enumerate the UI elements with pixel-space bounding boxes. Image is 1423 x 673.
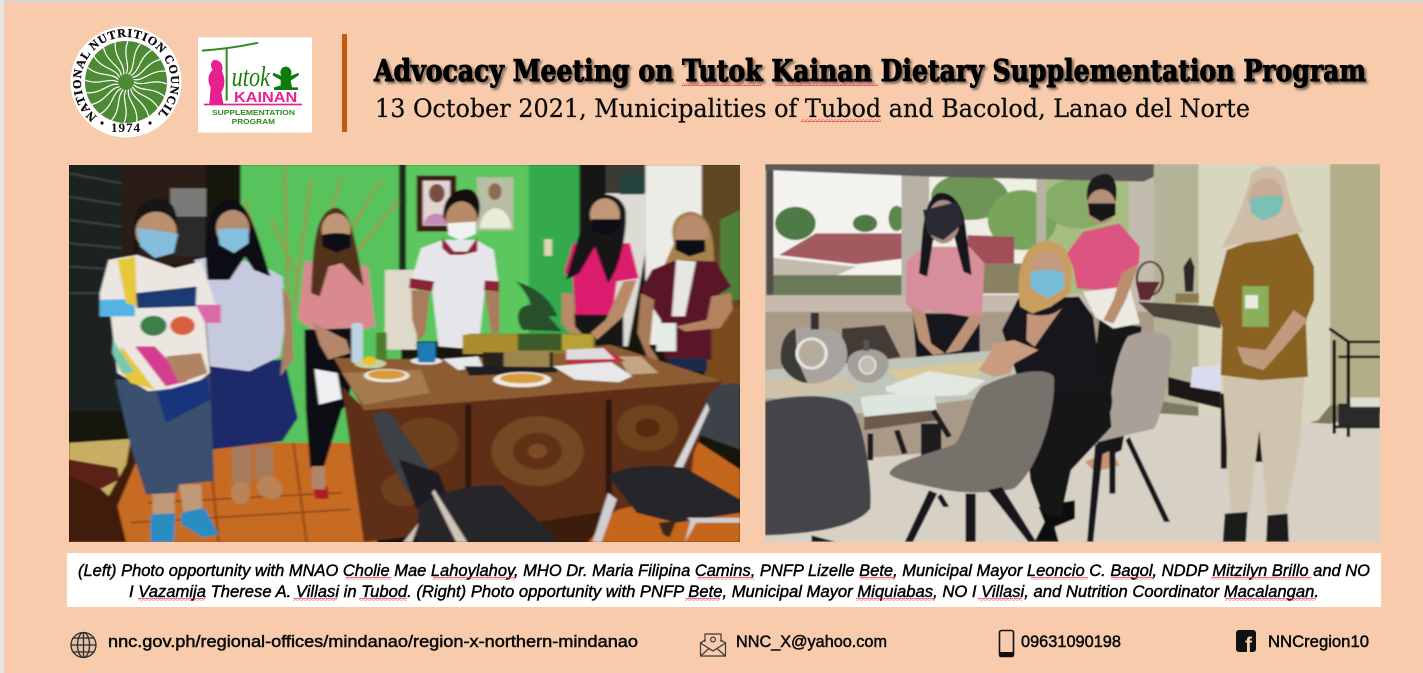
logo: National Nutrition Council seal: NATIONAL NUTRITION COUNCIL [72, 29, 180, 122]
icon: envelope [700, 634, 726, 656]
walls and window [765, 307, 1154, 467]
footer: phone [999, 630, 1121, 657]
frames [417, 176, 456, 232]
logo: Tutok Kainan Supplementation Program: KAINAN [234, 90, 297, 106]
chair: front centre [373, 412, 560, 542]
logo: National Nutrition Council seal: 1974 [111, 120, 141, 135]
floor [69, 443, 377, 543]
person 2: grey blouse and navy skirt [194, 199, 298, 504]
footer: phone: 09631090198 [1021, 632, 1121, 651]
caption panel [67, 553, 1381, 607]
person: seated mayor in black [979, 241, 1111, 542]
chair behind table [842, 325, 901, 367]
logo: Tutok Kainan Supplementation Program: SUPPLEMENTATION [212, 108, 296, 117]
icon: Facebook: f [1245, 634, 1253, 657]
person: standing right in pink polo [1067, 174, 1142, 472]
trolley [1329, 328, 1380, 437]
chair: front left [765, 396, 871, 535]
photo: right, group at the table in Bacolod [765, 164, 1380, 542]
footer: Facebook: NNCregion10 [1268, 632, 1369, 651]
caption line 2: I Vazamija Therese A. Villasi in Tubod. (Right) Photo opportunity with PNFP Bete, Municipal Mayor Miquiabas, NO I Villasi, and Nutrition Coordinator Macalangan. [129, 582, 1319, 601]
chair: right, light grey [1083, 332, 1171, 542]
desk items [351, 323, 632, 387]
footer: website: nnc.gov.ph/regional-offices/mindanao/region-x-northern-mindanao [108, 632, 638, 651]
icon: globe [71, 632, 96, 658]
caption line 1: (Left) Photo opportunity with MNAO Cholie Mae Lahoylahoy, MHO Dr. Maria Filipina Camins, PNFP Lizelle Bete, Municipal Mayor Leoncio C. Bagol, NDDP Mitzilyn Brillo and NO [78, 561, 1370, 580]
chair: front centre [812, 371, 1054, 542]
person 5: pink shirt [562, 195, 639, 346]
person 6: maroon shirt [637, 212, 733, 371]
silver apple ornaments [780, 313, 889, 384]
footer: Facebook [1236, 630, 1369, 657]
footer: website [71, 632, 638, 658]
subtitle: date and location: 13 October 2021, Municipalities of Tubod and Bacolod, Lanao del Norte [375, 94, 1250, 123]
chair: front right [593, 383, 740, 542]
accent bar [342, 34, 347, 132]
person: standing left [906, 193, 985, 367]
person 1: colourful shirt and jeans [100, 198, 221, 542]
table [765, 350, 1076, 542]
side table [1138, 302, 1221, 328]
person: standing in hijab and olive shirt [1213, 166, 1314, 542]
footer: email [700, 632, 887, 656]
logo: Tutok Kainan Supplementation Program [198, 37, 312, 133]
logo: Tutok Kainan Supplementation Program: utok [232, 62, 270, 93]
person 4: mayor [409, 189, 499, 350]
sofa [69, 440, 137, 542]
desk [334, 345, 722, 542]
logo: Tutok Kainan Supplementation Program: PROGRAM [232, 117, 275, 126]
person 3: pink striped blouse [298, 208, 375, 499]
icon: mobile phone [999, 630, 1014, 657]
plant [245, 167, 399, 326]
photo: left, group in the mayor's office in Tubod [69, 165, 740, 542]
footer: email: NNC_X@yahoo.com [736, 632, 887, 651]
office chair [385, 270, 417, 350]
